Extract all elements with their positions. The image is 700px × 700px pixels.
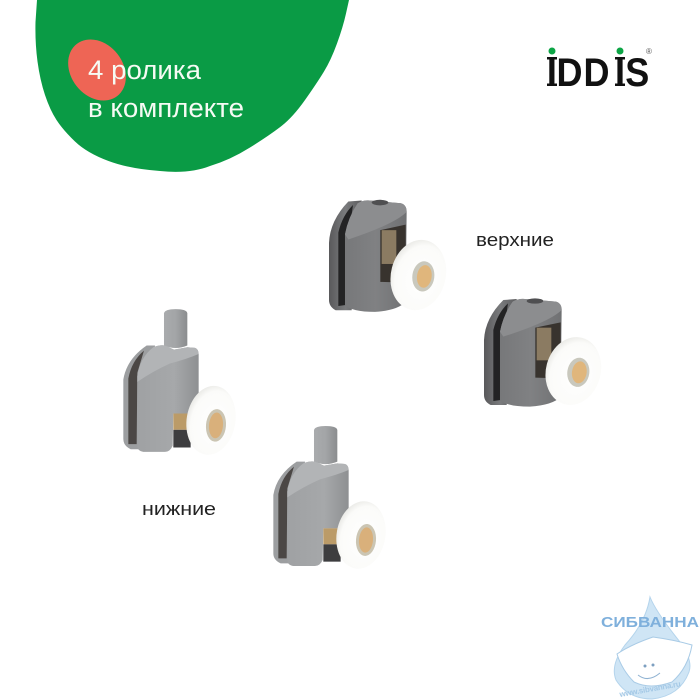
label: upper rollers: верхние [476, 229, 554, 250]
heading: 4 rollers in set: 4 ролика [88, 55, 201, 85]
watermark: Sibvanna logo: СИБВАННА [601, 615, 700, 631]
label: lower rollers: нижние [142, 498, 216, 519]
accent: coral blob [56, 28, 138, 112]
panel: green badge [35, 0, 349, 172]
product: lower roller 1 [123, 309, 241, 459]
watermark: Sibvanna logo [601, 597, 700, 699]
heading: 4 rollers in set [88, 55, 244, 123]
product: upper roller 1 [329, 200, 454, 317]
heading: 4 rollers in set: в комплекте [88, 93, 244, 123]
product: lower roller 2 [273, 426, 391, 573]
logo: IDDIS: IDDIS [547, 51, 649, 95]
product: upper roller 2 [484, 298, 609, 411]
watermark: Sibvanna logo: www.sibvanna.ru [618, 679, 682, 699]
logo: IDDIS: ® [646, 47, 652, 56]
